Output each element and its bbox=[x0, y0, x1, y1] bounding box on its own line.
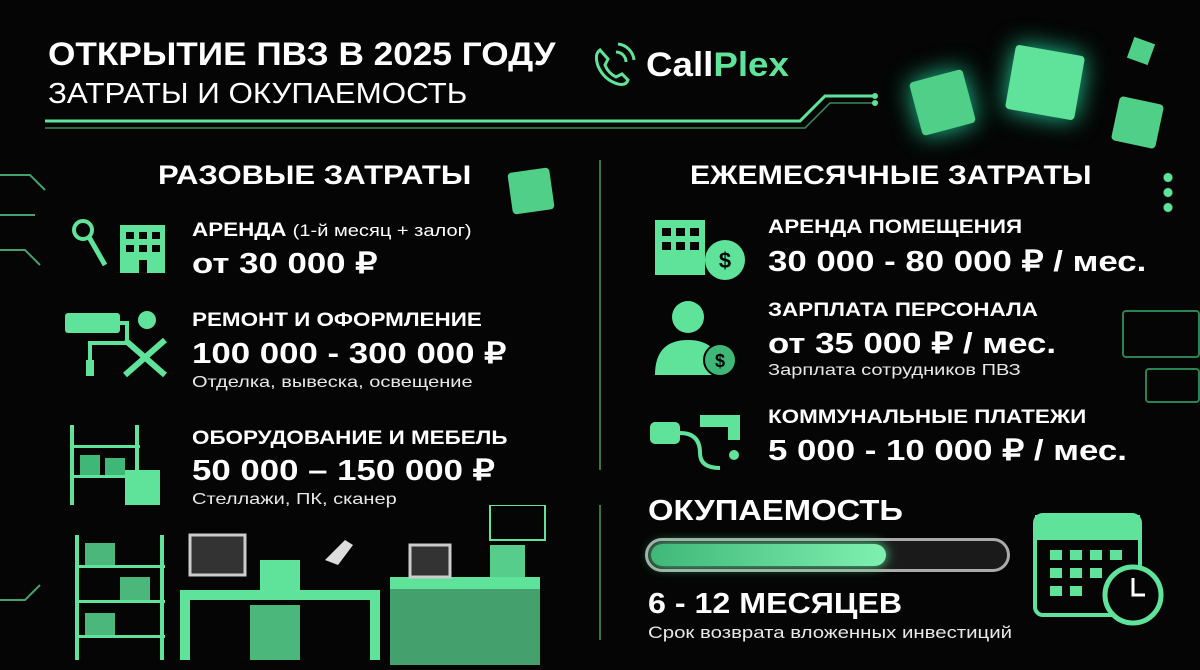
item: ремонт: 100 000 - 300 000 ₽ bbox=[192, 338, 506, 370]
dashboard icons bbox=[1122, 310, 1200, 358]
icon: box bbox=[507, 167, 555, 215]
item: оборудование: Стеллажи, ПК, сканер bbox=[192, 491, 397, 508]
item: аренда помещения: 30 000 - 80 000 ₽ / мес. bbox=[768, 246, 1146, 278]
item: зарплата: $ bbox=[715, 351, 725, 371]
item: аренда помещения: $ bbox=[719, 248, 731, 273]
heading: ежемесячные затраты: ЕЖЕМЕСЯЧНЫЕ ЗАТРАТЫ bbox=[690, 160, 1092, 190]
item: зарплата: Зарплата сотрудников ПВЗ bbox=[768, 362, 1021, 379]
item: аренда: АРЕНДА (1-й месяц + залог) bbox=[192, 220, 472, 241]
progress bar bbox=[645, 538, 1010, 572]
logo: CallPlex bbox=[594, 42, 789, 86]
item: оборудование bbox=[70, 425, 508, 508]
item: зарплата bbox=[655, 300, 1056, 379]
payback subtitle: Срок возврата вложенных инвестиций bbox=[648, 623, 1012, 642]
item: коммунальные bbox=[650, 407, 1127, 470]
item: аренда помещения: АРЕНДА ПОМЕЩЕНИЯ bbox=[768, 217, 1022, 238]
decorative boxes top right bbox=[893, 28, 1164, 152]
illustration: pickup point interior bbox=[75, 505, 546, 665]
logo: CallPlex: CallPlex bbox=[646, 46, 789, 84]
item: ремонт: Отделка, вывеска, освещение bbox=[192, 374, 473, 391]
item: зарплата: ЗАРПЛАТА ПЕРСОНАЛА bbox=[768, 300, 1038, 321]
item: ремонт bbox=[65, 310, 506, 391]
icon: calendar with clock bbox=[1033, 513, 1164, 626]
item: аренда помещения bbox=[655, 217, 1146, 280]
subtitle: ЗАТРАТЫ И ОКУПАЕМОСТЬ bbox=[48, 78, 467, 110]
heading: окупаемость: ОКУПАЕМОСТЬ bbox=[648, 495, 903, 527]
dots bbox=[1163, 170, 1173, 215]
heading: разовые затраты: РАЗОВЫЕ ЗАТРАТЫ bbox=[158, 160, 471, 190]
payback value: 6 - 12 МЕСЯЦЕВ bbox=[648, 588, 902, 620]
item: зарплата: от 35 000 ₽ / мес. bbox=[768, 328, 1056, 360]
item: коммунальные: КОММУНАЛЬНЫЕ ПЛАТЕЖИ bbox=[768, 407, 1086, 428]
item: оборудование: ОБОРУДОВАНИЕ И МЕБЕЛЬ bbox=[192, 428, 508, 449]
item: ремонт: РЕМОНТ И ОФОРМЛЕНИЕ bbox=[192, 310, 482, 331]
item: аренда: от 30 000 ₽ bbox=[192, 248, 377, 280]
item: оборудование: 50 000 – 150 000 ₽ bbox=[192, 455, 495, 487]
title: ОТКРЫТИЕ ПВЗ В 2025 ГОДУ bbox=[48, 36, 556, 72]
item: аренда bbox=[72, 219, 472, 280]
item: коммунальные: 5 000 - 10 000 ₽ / мес. bbox=[768, 435, 1127, 467]
